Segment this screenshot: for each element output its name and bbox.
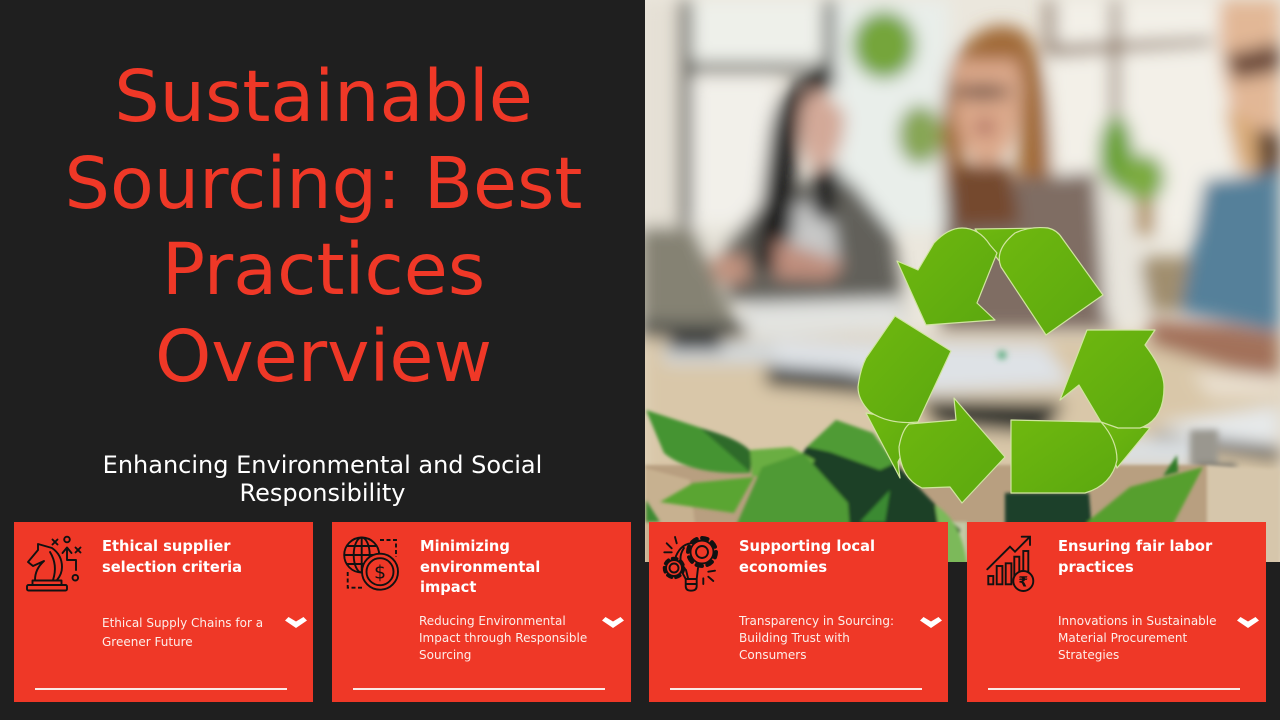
body text: Impact through Responsible <box>419 631 587 645</box>
title: Sustainable <box>114 55 533 138</box>
body text: Material Procurement <box>1058 631 1187 645</box>
body text: Ethical Supply Chains for a <box>102 616 263 630</box>
subtitle: Enhancing Environmental and Social <box>103 451 542 479</box>
heading <box>1058 538 1212 576</box>
body text <box>102 616 263 648</box>
title: Practices <box>162 228 485 311</box>
icon: globe and dollar coin <box>343 536 399 591</box>
heading <box>739 538 875 576</box>
heading: economies <box>739 559 827 576</box>
body text <box>419 614 587 662</box>
body text: Reducing Environmental <box>419 614 566 628</box>
body text: Building Trust with <box>739 631 850 645</box>
box <box>645 465 1280 570</box>
icon: growth chart with rupee coin: ₹ <box>1018 574 1028 590</box>
icon: light bulb with gears <box>662 536 718 592</box>
heading: practices <box>1058 559 1134 576</box>
body text: Consumers <box>739 648 806 662</box>
photo: team meeting behind green recycling symbol <box>645 0 1280 562</box>
icon: growth chart with rupee coin <box>986 536 1034 592</box>
panel: ethical supplier selection criteria <box>14 522 313 702</box>
icon: chevron <box>920 617 942 628</box>
panel: ensuring fair labor practices <box>967 522 1266 702</box>
title: Sourcing: Best <box>64 142 582 225</box>
title <box>64 55 582 398</box>
panel: supporting local economies <box>649 522 948 702</box>
icon: globe and dollar coin: $ <box>374 562 386 584</box>
body text <box>1058 614 1217 662</box>
icon: green recycling symbol <box>858 228 1164 503</box>
panel: minimizing environmental impact <box>332 522 631 702</box>
heading: Supporting local <box>739 538 875 555</box>
body text: Transparency in Sourcing: <box>739 614 894 628</box>
body text: Sourcing <box>419 648 471 662</box>
icon: chevron <box>1237 617 1259 628</box>
heading: Minimizing <box>420 538 510 555</box>
heading <box>102 538 242 576</box>
heading: impact <box>420 579 476 596</box>
icon: chevron <box>285 617 307 628</box>
heading: Ethical supplier <box>102 538 231 555</box>
heading: Ensuring fair labor <box>1058 538 1212 555</box>
heading: environmental <box>420 559 540 576</box>
subtitle: Responsibility <box>239 479 406 507</box>
title: Overview <box>155 315 492 398</box>
heading <box>420 538 540 596</box>
icon: chevron <box>602 617 624 628</box>
metal clip <box>998 351 1236 476</box>
heading: selection criteria <box>102 559 242 576</box>
icon: chess knight strategy <box>26 536 82 592</box>
body text: Strategies <box>1058 648 1119 662</box>
body text <box>738 614 894 662</box>
body text: Greener Future <box>102 634 193 648</box>
leaves <box>646 410 1203 570</box>
body text: Innovations in Sustainable <box>1058 614 1217 628</box>
subtitle <box>103 451 542 507</box>
